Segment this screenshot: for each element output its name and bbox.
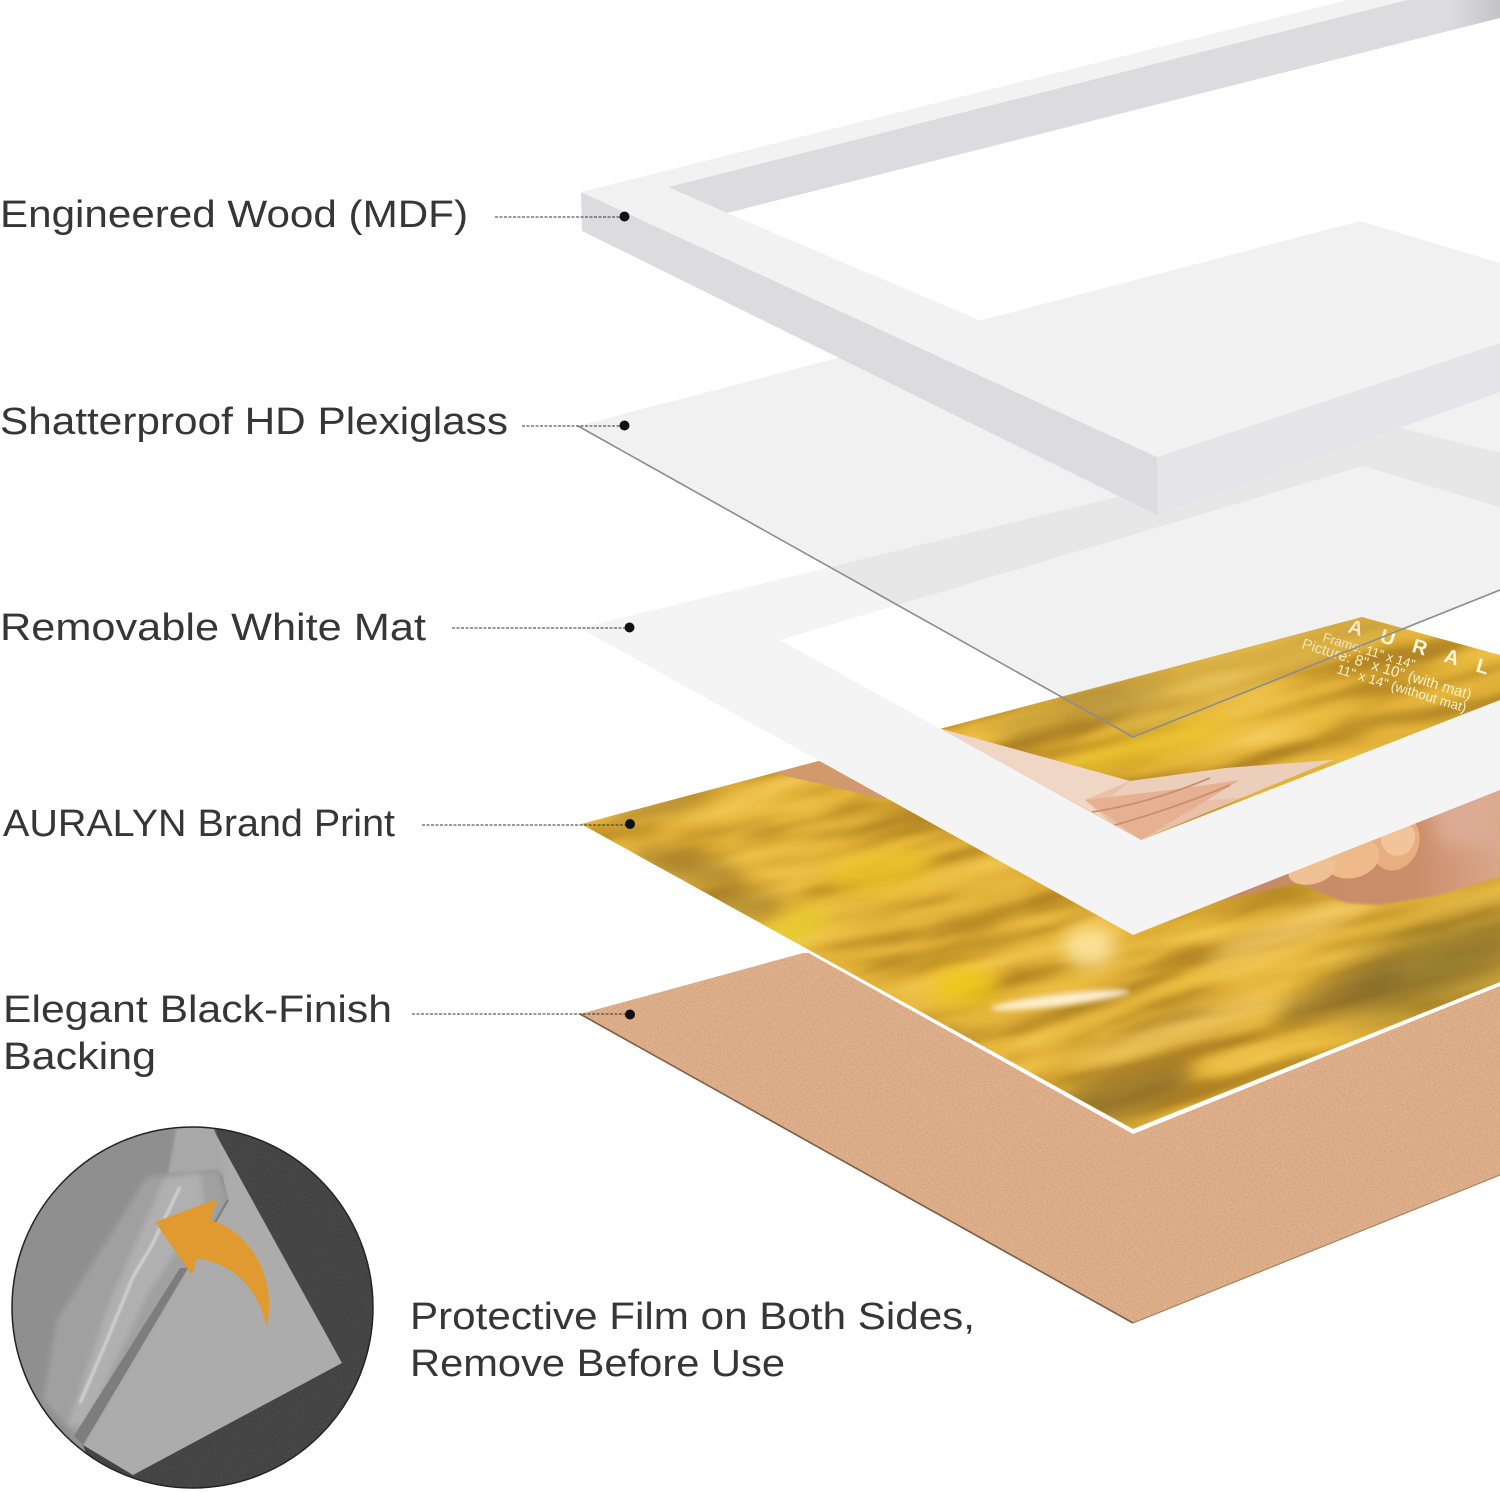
label: Removable White Mat: Removable White Mat xyxy=(0,607,426,649)
caption: protective film: Remove Before Use xyxy=(410,1343,785,1385)
wheat light and dark patches xyxy=(599,673,1500,1149)
label: Shatterproof Plexiglass: Shatterproof HD Plexiglass xyxy=(0,401,508,443)
label: Elegant Black-Finish Backing: Elegant Black-Finish xyxy=(3,989,392,1031)
caption: protective film: Protective Film on Both Sides, xyxy=(410,1296,975,1338)
label: AURALYN Brand Print: AURALYN Brand Print xyxy=(3,803,395,845)
hand seen through mat opening xyxy=(938,728,1333,840)
layer: MDF frame xyxy=(581,0,1500,515)
label: Elegant Black-Finish Backing xyxy=(3,989,635,1078)
print text: 11" x 14" (without mat) xyxy=(1335,662,1468,715)
frame right side face xyxy=(1157,343,1500,515)
hand below mat xyxy=(1225,790,1500,906)
layer: brand print xyxy=(581,617,1500,1134)
layer: removable white mat xyxy=(580,428,1500,935)
print text: Frame: 11" x 14" xyxy=(1321,630,1417,672)
print text: Picture: 8" x 10" (with mat) xyxy=(1300,636,1474,703)
label: Engineered Wood xyxy=(0,194,630,236)
caption: protective film xyxy=(410,1296,975,1385)
frame top face xyxy=(581,0,1500,457)
frame inner band xyxy=(668,0,1500,213)
label: Removable White Mat xyxy=(0,607,634,649)
layer: plexiglass sheet xyxy=(578,221,1500,737)
layer: backing board xyxy=(570,945,1500,1335)
label: Elegant Black-Finish Backing: Backing xyxy=(3,1036,156,1078)
label: Engineered Wood: Engineered Wood (MDF) xyxy=(0,194,468,236)
label: AURALYN Brand Print xyxy=(3,803,635,845)
hand fingertip patch at left of mat xyxy=(773,760,887,800)
frame left side face xyxy=(581,192,1157,515)
circular inset: film peel photo xyxy=(10,1125,376,1491)
icon: orange peel arrow xyxy=(155,1199,269,1327)
print text xyxy=(1302,620,1487,714)
